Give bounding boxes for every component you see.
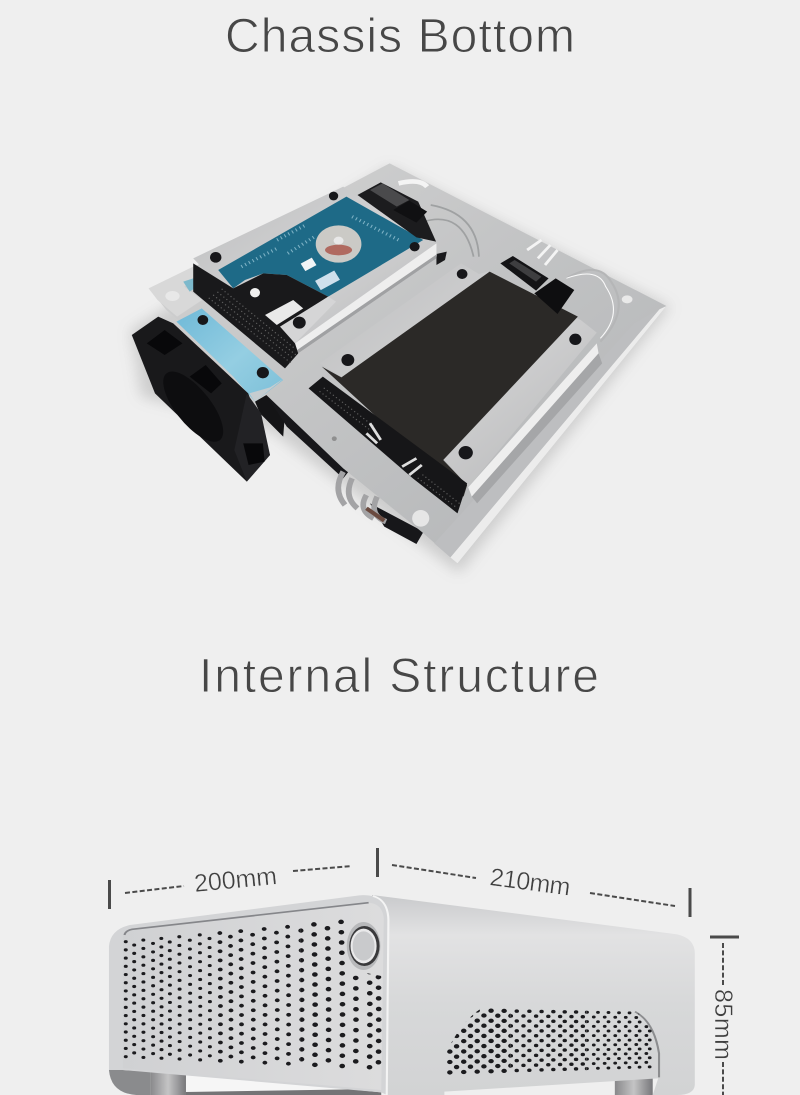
hard disk: blue circuit board [218, 197, 423, 297]
side dots: far columns [586, 1010, 652, 1070]
screws [210, 192, 581, 459]
bracket: lower drive [320, 263, 602, 503]
title: Internal Structure: Internal Structure [199, 650, 599, 703]
case side panel [372, 895, 695, 1095]
rear shelf strip [186, 1089, 381, 1095]
front dots: near columns [300, 920, 382, 1070]
under-chassis parts and heat pipes [255, 395, 424, 544]
cooling fan [132, 317, 270, 482]
bottom left dark corner [109, 1070, 150, 1095]
gap below upper drive [436, 252, 447, 265]
dimension: 200mm width [110, 848, 378, 909]
product photo: chassis bottom plate with drives and fan [131, 163, 670, 573]
cable bundles [399, 181, 619, 342]
dimension: 210mm depth [392, 863, 690, 917]
dimension: 200mm width: 200mm [193, 862, 278, 898]
side ventilation mesh [450, 1010, 656, 1072]
front dots: middle columns [218, 924, 300, 1066]
power button [347, 922, 380, 970]
fan bracket: blue metal plate [176, 308, 284, 402]
side panel vent edge [635, 1012, 659, 1077]
aluminium base plate [149, 163, 666, 563]
product photo: aluminium case with dimensions [109, 895, 695, 1095]
dimension: 85mm height: 85mm [709, 989, 737, 1060]
side dots: middle columns [511, 1009, 587, 1072]
drive connectors and cables [309, 256, 574, 513]
case front frame [109, 895, 389, 1095]
front panel face [123, 903, 384, 1090]
side dots: near columns [447, 1008, 511, 1075]
left foot [150, 1070, 186, 1095]
soft drop shadow [131, 167, 670, 573]
hard disk: black motor housing and pin connector [193, 263, 328, 368]
bright bracket corner by screw [280, 297, 336, 343]
solid state drive: black enclosure [322, 272, 578, 497]
shadow under top lip [125, 903, 369, 935]
right foot [615, 1075, 653, 1095]
hard disk: power and data connector [357, 182, 436, 242]
highlight on front corner [373, 896, 388, 1095]
front dots: far columns [124, 933, 212, 1062]
title: Chassis Bottom: Chassis Bottom [225, 10, 575, 63]
gap below case [186, 1072, 381, 1095]
bracket: upper drive [193, 187, 437, 353]
dimension: 210mm depth: 210mm [488, 863, 572, 902]
front ventilation mesh [126, 918, 380, 1068]
